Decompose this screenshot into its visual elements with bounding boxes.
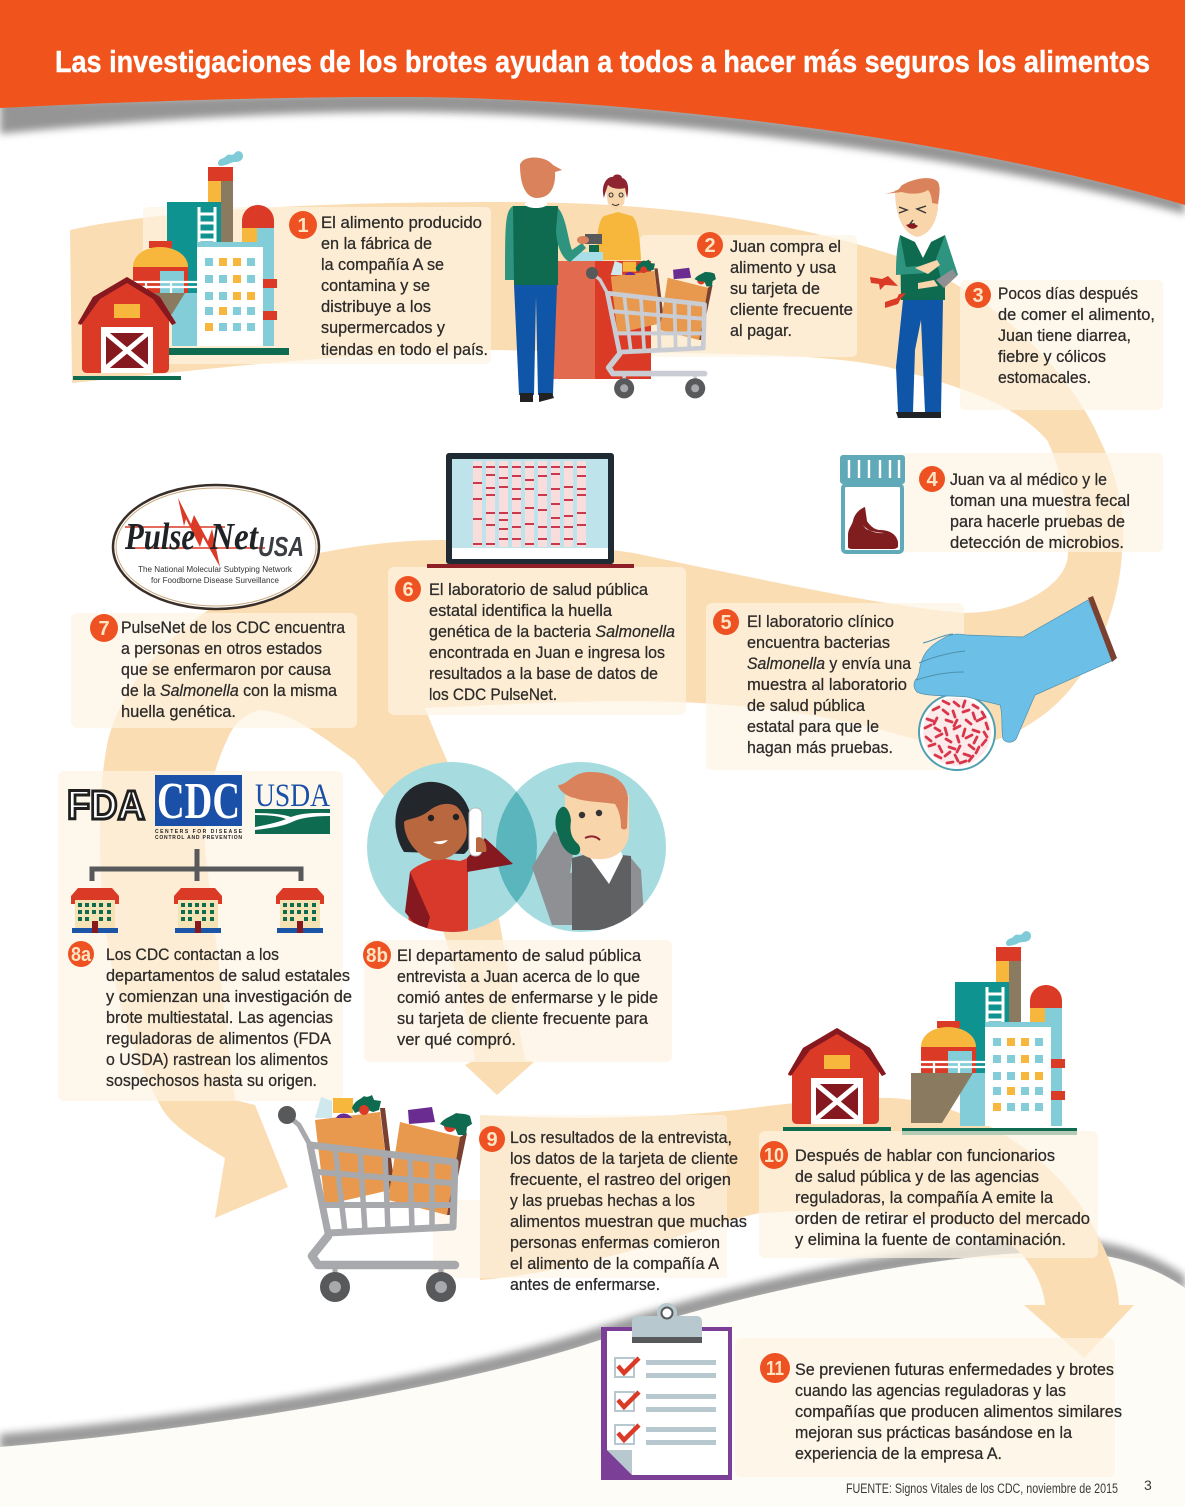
icon: sick man [885, 178, 958, 418]
text step 5: Salmonella y envía una [747, 655, 912, 673]
text step 2: Juan compra el [730, 238, 841, 256]
icon: pain bolts [870, 276, 906, 308]
connector tree [92, 849, 301, 881]
icon: barn [783, 1028, 891, 1131]
step 5: clinical lab [706, 596, 1117, 770]
step 9: results [278, 1095, 747, 1302]
text step 11 [795, 1361, 1122, 1463]
text step 9: personas enfermas comieron [510, 1234, 720, 1252]
step 4: stool sample [840, 453, 1163, 552]
step 7: PulseNet [71, 485, 357, 728]
text step 8b [397, 947, 658, 1049]
text step 1: la compañía A se [321, 256, 444, 274]
panel 8b background [364, 940, 672, 1062]
icon: phone call illustration [367, 762, 666, 937]
text step 9: Los resultados de la entrevista, [510, 1129, 732, 1147]
text step 8a: departamentos de salud estatales [106, 967, 350, 985]
panel 8a background [58, 771, 343, 1101]
text step 3: de comer el alimento, [998, 306, 1155, 324]
text step 9: frecuente, el rastreo del origen [510, 1171, 731, 1189]
flow ribbon: steps 9 to 11 with arrow [480, 1098, 1134, 1358]
text step 6: estatal identifica la huella [429, 602, 613, 620]
text step 11: cuando las agencias reguladoras y las [795, 1382, 1066, 1400]
text step 4: Juan va al médico y le [950, 471, 1107, 489]
badge 9: 9 [486, 1129, 498, 1151]
panel 7 background [71, 613, 357, 728]
text step 7: a personas en otros estados [121, 640, 322, 658]
text step 3 [998, 285, 1155, 387]
text step 7: huella genética. [121, 703, 236, 721]
text step 8a [106, 946, 352, 1090]
text step 8b: su tarjeta de cliente frecuente para [397, 1010, 649, 1028]
panel 4 background [900, 453, 1163, 552]
text step 1: contamina y se [321, 277, 430, 295]
text step 10 [795, 1147, 1090, 1249]
register and card terminal [567, 234, 603, 261]
text step 11: experiencia de la empresa A. [795, 1445, 1002, 1463]
logo: CDC: CONTROL AND PREVENTION [155, 835, 242, 841]
logo: FDA: FDA [67, 782, 145, 828]
text step 6: encontrada en Juan e ingresa los [429, 644, 665, 662]
badge 4 [919, 466, 945, 492]
step 10: recall [759, 931, 1098, 1258]
text step 9 [510, 1129, 747, 1294]
step 8b: phone interview [363, 762, 672, 1062]
text step 1: El alimento producido [321, 214, 482, 232]
text step 8a: sospechosos hasta su origen. [106, 1072, 317, 1090]
badge 1 [289, 211, 317, 239]
cashier [596, 174, 641, 260]
step 2: checkout illustration and text [505, 158, 857, 402]
text step 5: estatal para que le [747, 718, 879, 736]
panel 6 background [388, 567, 686, 715]
panel 11 background [735, 1338, 1115, 1477]
text step 5: hagan más pruebas. [747, 739, 893, 757]
panel 9 background [433, 1115, 727, 1278]
Juan from behind [505, 158, 589, 402]
icon: sample jar [840, 455, 905, 552]
logo: CDC [155, 773, 243, 841]
text step 7: de la Salmonella con la misma [121, 682, 338, 700]
text step 10: orden de retirar el producto del mercado [795, 1210, 1090, 1228]
logo: PulseNet USA [113, 485, 319, 609]
text step 3: fiebre y cólicos [998, 348, 1106, 366]
header band [0, 0, 1185, 205]
counter [553, 261, 651, 379]
panel 5 background [706, 603, 964, 770]
badge 4: 4 [926, 469, 938, 491]
badge 3: 3 [972, 285, 984, 307]
icon: blue glove [914, 596, 1117, 742]
icon: petri dish [919, 694, 995, 770]
logo: CDC: CENTERS FOR DISEASE [155, 829, 243, 835]
step 8a: agencies [58, 771, 352, 1101]
panel 3 background [960, 280, 1163, 410]
text step 1: tiendas en todo el país. [321, 341, 488, 359]
page number: 3 [1144, 1477, 1152, 1493]
badge 2 [697, 232, 723, 258]
text step 10: reguladoras, la compañía A emite la [795, 1189, 1054, 1207]
badge 1: 1 [297, 215, 309, 237]
text step 6: resultados a la base de datos de [429, 665, 658, 683]
logo: PulseNet USA: The National Molecular Subtyping Network [138, 564, 293, 574]
icon: factory [114, 151, 289, 355]
panel 2 background [640, 235, 857, 357]
header shadow [0, 92, 1185, 214]
step 1: factory and barn illustration [73, 151, 491, 380]
badge 10: 10 [764, 1145, 784, 1167]
text step 11: Se previenen futuras enfermedades y brotes [795, 1361, 1114, 1379]
badge 8b [363, 941, 391, 969]
shopping cart small [586, 260, 716, 398]
text step 6: El laboratorio de salud pública [429, 581, 649, 599]
text step 5: El laboratorio clínico [747, 613, 894, 631]
text step 6 [429, 581, 675, 704]
source note: FUENTE: Signos Vitales de los CDC, noviembre de 2015 [846, 1481, 1118, 1496]
text step 8a: reguladoras de alimentos (FDA [106, 1030, 331, 1048]
text step 5: de salud pública [747, 697, 866, 715]
panel 10 background [759, 1131, 1098, 1258]
text step 2: cliente frecuente [730, 301, 853, 319]
logo: PulseNet USA: Net [209, 516, 259, 558]
step 11: prevention [601, 1303, 1122, 1480]
step 3: sick Juan [870, 178, 1163, 418]
badge 2: 2 [704, 235, 716, 257]
text step 6: genética de la bacteria Salmonella [429, 623, 675, 641]
text step 2 [730, 238, 853, 340]
logo: PulseNet USA: for Foodborne Disease Surveillance [151, 575, 279, 585]
badge 6 [395, 576, 421, 602]
text step 1: en la fábrica de [321, 235, 432, 253]
badge 5 [713, 609, 739, 635]
text step 4: detección de microbios. [950, 534, 1124, 552]
text step 9: alimentos muestran que muchas [510, 1213, 747, 1231]
badge 7 [90, 614, 118, 642]
text step 8b: comió antes de enfermarse y le pide [397, 989, 658, 1007]
text step 9: antes de enfermarse. [510, 1276, 660, 1294]
text step 4: para hacerle pruebas de [950, 513, 1125, 531]
badge 3 [965, 282, 991, 308]
text step 7: que se enfermaron por causa [121, 661, 332, 679]
text step 9: y las pruebas hechas a los [510, 1192, 695, 1210]
badge 8b: 8b [366, 945, 388, 967]
icon: laptop with gel [427, 453, 634, 568]
text step 3: estomacales. [998, 369, 1091, 387]
text step 11: mejoran sus prácticas basándose en la [795, 1424, 1073, 1442]
badge 8a: 8a [71, 944, 92, 966]
icon: shopping cart large [278, 1095, 472, 1302]
text step 5: encuentra bacterias [747, 634, 890, 652]
text step 10: Después de hablar con funcionarios [795, 1147, 1055, 1165]
logo: USDA: USDA [255, 778, 330, 814]
badge 10 [760, 1141, 788, 1169]
text step 8b: entrevista a Juan acerca de lo que [397, 968, 640, 986]
text step 2: al pagar. [730, 322, 792, 340]
text step 5 [747, 613, 912, 757]
step 6: state lab [388, 453, 686, 715]
text step 7 [121, 619, 346, 721]
text step 4: toman una muestra fecal [950, 492, 1130, 510]
logo: CDC: CDC [157, 773, 240, 830]
text step 8a: Los CDC contactan a los [106, 946, 279, 964]
badge 11 [760, 1353, 790, 1383]
logo: USDA [255, 778, 330, 834]
text step 8a: y comienzan una investigación de [106, 988, 352, 1006]
text step 8b: ver qué compró. [397, 1031, 516, 1049]
icon: health departments [71, 888, 324, 933]
logo: PulseNet USA: Pulse [124, 516, 195, 558]
icon: barn [73, 277, 181, 380]
logo: PulseNet USA: USA [258, 531, 304, 562]
text step 2: su tarjeta de [730, 280, 820, 298]
text step 3: Pocos días después [998, 285, 1138, 303]
text step 7: PulseNet de los CDC encuentra [121, 619, 346, 637]
badge 6: 6 [402, 579, 414, 601]
badge 9 [479, 1126, 505, 1152]
text step 8b: El departamento de salud pública [397, 947, 642, 965]
text step 2: alimento y usa [730, 259, 837, 277]
text step 11: compañías que producen alimentos similares [795, 1403, 1122, 1421]
text step 1: distribuye a los [321, 298, 431, 316]
flow ribbon: steps 1 to 9 with forked arrows [70, 202, 1123, 1218]
panel 1 background [143, 207, 491, 364]
icon: factory [902, 931, 1077, 1135]
text step 5: muestra al laboratorio [747, 676, 907, 694]
text step 10: de salud pública y de las agencias [795, 1168, 1039, 1186]
text step 8a: brote multiestatal. Las agencias [106, 1009, 333, 1027]
text step 4 [950, 471, 1130, 552]
text step 8a: o USDA) rastrean los alimentos [106, 1051, 328, 1069]
icon: clipboard checklist [601, 1303, 732, 1480]
text step 10: y elimina la fuente de contaminación. [795, 1231, 1066, 1249]
badge 7: 7 [98, 618, 110, 640]
text step 6: los CDC PulseNet. [429, 686, 557, 704]
text step 9: el alimento de la compañía A [510, 1255, 719, 1273]
text step 1 [321, 214, 488, 359]
badge 11: 11 [766, 1358, 784, 1380]
text step 1: supermercados y [321, 319, 446, 337]
badge 5: 5 [720, 612, 732, 634]
background: lower off-white swoosh with shadow [0, 1239, 1185, 1506]
text step 9: los datos de la tarjeta de cliente [510, 1150, 738, 1168]
text step 3: Juan tiene diarrea, [998, 327, 1131, 345]
